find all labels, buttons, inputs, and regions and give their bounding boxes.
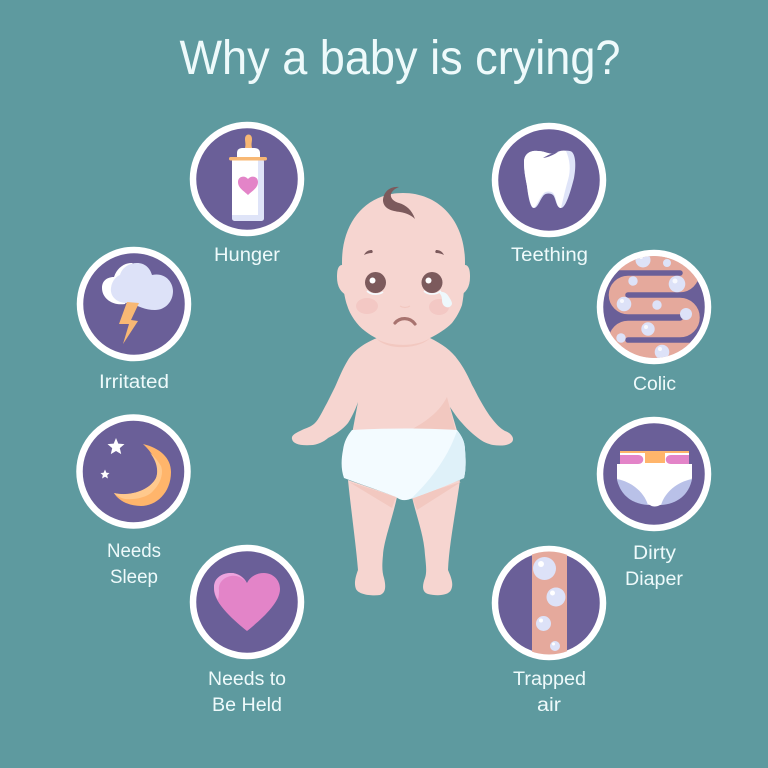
icon: tooth [524,151,575,208]
baby eyes [365,272,442,294]
icon: moon and stars [100,438,171,506]
baby brows [364,250,444,255]
icon: intestines with bubbles [608,256,700,358]
baby legs [348,480,460,595]
label: Trapped air: air [537,695,562,716]
label: Needs to Be Held: Be Held [212,695,282,716]
label: Irritated: Irritated [99,372,169,393]
baby head [337,187,470,347]
label: Dirty Diaper: Diaper [625,569,684,590]
icon: diaper [617,451,692,506]
baby tear [438,292,452,307]
label: Teething: Teething [511,245,588,266]
baby torso and arms [292,338,513,446]
icon circle: Trapped air [495,549,603,657]
icon: heart [214,573,280,631]
icon circle: Needs to Be Held [193,548,301,656]
label: Colic: Colic [633,374,676,395]
label: Needs Sleep: Sleep [110,567,158,588]
icon circle: Irritated [80,250,188,358]
icon: baby bottle [229,134,267,221]
icon: storm cloud [102,263,173,344]
baby diaper [342,428,466,500]
title: Why a baby is crying? [180,32,620,85]
icon circle: Teething [495,126,603,234]
baby hair [383,187,415,219]
icon circle: Dirty Diaper [600,420,708,528]
label: Trapped air [513,669,586,716]
label: Dirty Diaper [625,543,684,590]
label: Needs to Be Held [208,669,286,716]
baby nose [400,306,410,308]
label: Trapped air: Trapped [513,669,586,690]
icon circle: Colic [600,252,708,361]
icon circle: Hunger [193,125,301,233]
baby illustration [292,187,513,595]
label: Hunger: Hunger [214,245,281,266]
label: Needs Sleep: Needs [107,541,161,562]
label: Dirty Diaper: Dirty [633,543,677,564]
icon circle: Needs Sleep [80,418,188,526]
label: Needs to Be Held: Needs to [208,669,286,690]
label: Needs Sleep [107,541,161,588]
icon: bubbles in gut [532,550,567,656]
baby mouth [395,319,415,324]
